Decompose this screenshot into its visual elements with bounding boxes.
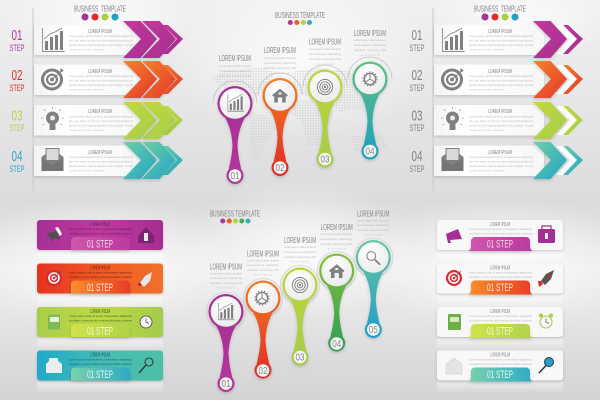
step 02 row: enim ad minim veniam. [69, 88, 105, 92]
pin 04: sed diam nonummy nibh [354, 48, 386, 52]
pin 04: LOREM IPSUM [321, 222, 353, 232]
card teal [37, 350, 163, 392]
card teal: LOREM IPSUM [90, 352, 110, 358]
card purple [437, 220, 563, 262]
card red [37, 264, 163, 306]
card purple: 01 STEP [487, 238, 513, 250]
step 04 row: STEP [410, 164, 424, 175]
pin 04: LOREM IPSUM [354, 28, 386, 38]
step 01 row [10, 21, 183, 58]
card teal: sed diam nonummy nibh euismod tincidunt ut laoreet [469, 362, 532, 366]
step 04 row: LOREM IPSUM [488, 150, 512, 156]
pin 02: consectetuer adipiscing [247, 263, 279, 267]
step 01 row: Lorem ipsum dolor sit amet, consectetuer adipiscing [69, 34, 133, 38]
step 02 row: STEP [10, 83, 24, 94]
pin 02 [258, 45, 302, 176]
step 02 row: Lorem ipsum dolor sit amet, consectetuer adipiscing [469, 74, 533, 78]
panel: five-step staircase timeline [206, 208, 393, 392]
pin 04: 04 [366, 146, 375, 158]
panel divider line [32, 8, 34, 191]
pin 02: LOREM IPSUM [247, 248, 279, 258]
pin 04: Lorem ipsum dolor sit amet [320, 232, 352, 236]
card purple: sed diam nonummy nibh euismod tincidunt ut laoreet [69, 232, 132, 236]
pin 01: LOREM IPSUM [210, 262, 242, 272]
step 01 row: 01 [412, 28, 422, 44]
pin 02: Lorem ipsum dolor sit amet [247, 258, 279, 262]
step 03 row: laoreet dolore magna aliquam erat volutpat. Ut wisi [469, 124, 533, 128]
step 03 row: Lorem ipsum dolor sit amet, consectetuer adipiscing [469, 114, 533, 118]
title: BUSINESS TEMPLATE [474, 4, 526, 14]
step 02 row: elit, sed diam nonummy nibh euismod tincidunt ut [69, 78, 133, 82]
step 01 row: Lorem ipsum dolor sit amet, consectetuer adipiscing [469, 34, 533, 38]
step 02 row: LOREM IPSUM [488, 69, 512, 75]
step 01 row: enim ad minim veniam. [469, 48, 505, 52]
step 01 row: elit, sed diam nonummy nibh euismod tincidunt ut [469, 38, 533, 42]
pin 03 [280, 235, 320, 366]
pin 01: 01 [222, 379, 231, 390]
dotted world map [210, 68, 388, 160]
panel divider line [432, 8, 434, 191]
pin 01: sed diam nonummy nibh [210, 281, 242, 285]
step 03 row: laoreet dolore magna aliquam erat volutpat. Ut wisi [69, 124, 133, 128]
step 01 row: STEP [410, 43, 424, 54]
card green [37, 307, 163, 349]
step 02 row: laoreet dolore magna aliquam erat volutpat. Ut wisi [469, 83, 533, 87]
step 01 row: enim ad minim veniam. [69, 48, 105, 52]
step 03 row: elit, sed diam nonummy nibh euismod tincidunt ut [469, 119, 533, 123]
pin 03: Lorem ipsum dolor sit amet [309, 47, 341, 51]
pin 01: consectetuer adipiscing [210, 276, 242, 280]
pin 05: Lorem ipsum dolor sit amet [357, 218, 389, 222]
step 02 row: laoreet dolore magna aliquam erat volutpat. Ut wisi [69, 83, 133, 87]
pin 05: sed diam nonummy nibh [357, 228, 389, 232]
card green: sed diam nonummy nibh euismod tincidunt ut laoreet [69, 318, 132, 322]
pin 01: sed diam nonummy nibh [219, 74, 251, 78]
pin 03: 03 [296, 352, 305, 364]
card purple: Lorem ipsum dolor sit amet, consectetuer adipiscing [69, 227, 132, 231]
pin 05 [354, 208, 393, 338]
panel: white banner cards [437, 220, 563, 392]
step 04 row: Lorem ipsum dolor sit amet, consectetuer adipiscing [469, 155, 533, 159]
card teal: 01 STEP [487, 369, 513, 381]
card orange: 01 STEP [487, 282, 513, 294]
card green: Lorem ipsum dolor sit amet, consectetuer adipiscing [469, 314, 532, 318]
step 01 row: LOREM IPSUM [88, 29, 112, 35]
pin 01: euismod [226, 79, 244, 83]
step 02 row: elit, sed diam nonummy nibh euismod tincidunt ut [469, 78, 533, 82]
step 04 row: elit, sed diam nonummy nibh euismod tincidunt ut [69, 160, 133, 164]
pin 01: Lorem ipsum dolor sit amet [219, 64, 251, 68]
title: BUSINESS TEMPLATE [210, 208, 260, 218]
step 02 row: enim ad minim veniam. [469, 88, 505, 92]
card red: Lorem ipsum dolor sit amet, consectetuer adipiscing [69, 270, 132, 274]
panel: arrow steps, gray numbers [410, 4, 583, 191]
pin 03: consectetuer adipiscing [284, 250, 316, 254]
pin 02: euismod [254, 272, 272, 276]
pin 02: 02 [276, 163, 285, 174]
card green: LOREM IPSUM [490, 309, 510, 315]
pin 03: LOREM IPSUM [284, 235, 316, 245]
pin 03: Lorem ipsum dolor sit amet [284, 245, 316, 249]
colour dots [82, 14, 118, 20]
step 04 row: 04 [12, 149, 22, 165]
card green: 01 STEP [487, 326, 513, 338]
step 03 row: enim ad minim veniam. [69, 128, 105, 132]
step 04 row: STEP [10, 164, 24, 175]
card purple: Lorem ipsum dolor sit amet, consectetuer adipiscing [469, 227, 532, 231]
step 03 row: 03 [12, 108, 22, 124]
card purple: sed diam nonummy nibh euismod tincidunt ut laoreet [469, 232, 532, 236]
pin 02: sed diam nonummy nibh [247, 268, 279, 272]
pin 05: euismod [364, 232, 382, 236]
pin 04: 04 [332, 339, 342, 350]
step 02 row: STEP [410, 83, 424, 94]
card green: 01 STEP [87, 326, 113, 338]
step 01 row: laoreet dolore magna aliquam erat volutpat. Ut wisi [69, 43, 133, 47]
pin 01 [206, 262, 246, 392]
pin 05: 05 [369, 325, 378, 336]
pin 03: euismod [316, 62, 334, 66]
card purple: LOREM IPSUM [490, 222, 510, 228]
step 03 row: LOREM IPSUM [488, 109, 512, 115]
step 03 row [10, 102, 183, 139]
pin 03: consectetuer adipiscing [309, 52, 341, 56]
pin 04: euismod [328, 246, 346, 250]
pin 01: Lorem ipsum dolor sit amet [210, 272, 242, 276]
card teal: LOREM IPSUM [490, 352, 510, 358]
pin 04: consectetuer adipiscing [354, 43, 386, 47]
pin 05: consectetuer adipiscing [357, 223, 389, 227]
pin 02: euismod [271, 71, 289, 75]
colour dots [220, 218, 250, 224]
pin 02: LOREM IPSUM [264, 45, 296, 55]
step 03 row [410, 102, 583, 139]
step 03 row: elit, sed diam nonummy nibh euismod tincidunt ut [69, 119, 133, 123]
step 02 row [10, 61, 183, 98]
card red: sed diam nonummy nibh euismod tincidunt ut laoreet [69, 275, 132, 279]
card green: LOREM IPSUM [90, 309, 110, 315]
step 02 row: 02 [12, 68, 22, 84]
pin 02: 02 [258, 366, 268, 377]
step 03 row: STEP [410, 123, 424, 134]
card teal [437, 350, 563, 392]
step 01 row: laoreet dolore magna aliquam erat volutpat. Ut wisi [469, 43, 533, 47]
pin 05: LOREM IPSUM [357, 208, 389, 218]
step 04 row: laoreet dolore magna aliquam erat volutpat. Ut wisi [469, 164, 533, 168]
pin 02: consectetuer adipiscing [264, 61, 296, 65]
card purple: 01 STEP [87, 238, 113, 250]
pin 03: 03 [320, 154, 330, 166]
card orange: sed diam nonummy nibh euismod tincidunt ut laoreet [469, 275, 532, 279]
card orange: LOREM IPSUM [490, 266, 510, 272]
card green [437, 307, 563, 349]
title: BUSINESS TEMPLATE [275, 10, 325, 20]
step 03 row: STEP [10, 123, 24, 134]
pin 04 [348, 28, 392, 160]
pin 01: euismod [217, 286, 235, 290]
step 04 row: enim ad minim veniam. [469, 168, 505, 172]
step 02 row [410, 61, 583, 98]
card orange [437, 264, 563, 306]
card orange: Lorem ipsum dolor sit amet, consectetuer adipiscing [469, 270, 532, 274]
step 01 row: elit, sed diam nonummy nibh euismod tincidunt ut [69, 38, 133, 42]
pin 01: 01 [230, 171, 240, 182]
step 03 row: 03 [412, 108, 422, 124]
pin 01 [213, 53, 257, 184]
panel: world map timeline [210, 10, 392, 184]
pin 04: euismod [361, 53, 379, 57]
pin 03 [303, 36, 347, 168]
step 04 row: LOREM IPSUM [88, 150, 112, 156]
pin 04: sed diam nonummy nibh [320, 242, 352, 246]
card teal: Lorem ipsum dolor sit amet, consectetuer adipiscing [69, 358, 132, 362]
step 04 row: Lorem ipsum dolor sit amet, consectetuer adipiscing [69, 155, 133, 159]
pin 04 [317, 222, 356, 352]
step 03 row: LOREM IPSUM [88, 109, 112, 115]
step 02 row: Lorem ipsum dolor sit amet, consectetuer adipiscing [69, 74, 133, 78]
pin 01: LOREM IPSUM [219, 53, 251, 63]
card red: LOREM IPSUM [90, 266, 110, 272]
step 04 row: 04 [412, 149, 422, 165]
card purple [37, 220, 163, 262]
card teal: 01 STEP [87, 369, 113, 381]
pin 02: Lorem ipsum dolor sit amet [264, 56, 296, 60]
pin 03: sed diam nonummy nibh [309, 57, 341, 61]
pin 03: LOREM IPSUM [309, 36, 341, 46]
panel: arrow steps, coloured [10, 4, 183, 191]
step 04 row [10, 142, 183, 179]
pin 03: sed diam nonummy nibh [284, 255, 316, 259]
step 03 row: Lorem ipsum dolor sit amet, consectetuer adipiscing [69, 114, 133, 118]
step 01 row [410, 21, 583, 58]
step 01 row: STEP [10, 43, 24, 54]
step 01 row: 01 [12, 28, 22, 44]
step 04 row: elit, sed diam nonummy nibh euismod tincidunt ut [469, 160, 533, 164]
pin 01: consectetuer adipiscing [219, 69, 251, 73]
step 02 row: LOREM IPSUM [88, 69, 112, 75]
step 04 row: laoreet dolore magna aliquam erat volutpat. Ut wisi [69, 164, 133, 168]
card green: sed diam nonummy nibh euismod tincidunt ut laoreet [469, 318, 532, 322]
card purple: LOREM IPSUM [90, 222, 110, 228]
step 04 row [410, 142, 583, 179]
card red: 01 STEP [87, 282, 113, 294]
colour dots [482, 14, 518, 20]
colour dots [288, 20, 312, 25]
step 01 row: LOREM IPSUM [488, 29, 512, 35]
pin 02 [244, 248, 282, 378]
card green: Lorem ipsum dolor sit amet, consectetuer adipiscing [69, 314, 132, 318]
pin 04: consectetuer adipiscing [320, 237, 352, 241]
step 04 row: enim ad minim veniam. [69, 168, 105, 172]
card teal: Lorem ipsum dolor sit amet, consectetuer adipiscing [469, 358, 532, 362]
pin 02: sed diam nonummy nibh [264, 66, 296, 70]
panel: coloured banner cards [37, 220, 163, 392]
title: BUSINESS TEMPLATE [74, 4, 126, 14]
step 03 row: enim ad minim veniam. [469, 128, 505, 132]
pin 04: Lorem ipsum dolor sit amet [354, 38, 386, 42]
pin 03: euismod [291, 260, 309, 264]
card teal: sed diam nonummy nibh euismod tincidunt ut laoreet [69, 362, 132, 366]
step 02 row: 02 [412, 68, 422, 84]
